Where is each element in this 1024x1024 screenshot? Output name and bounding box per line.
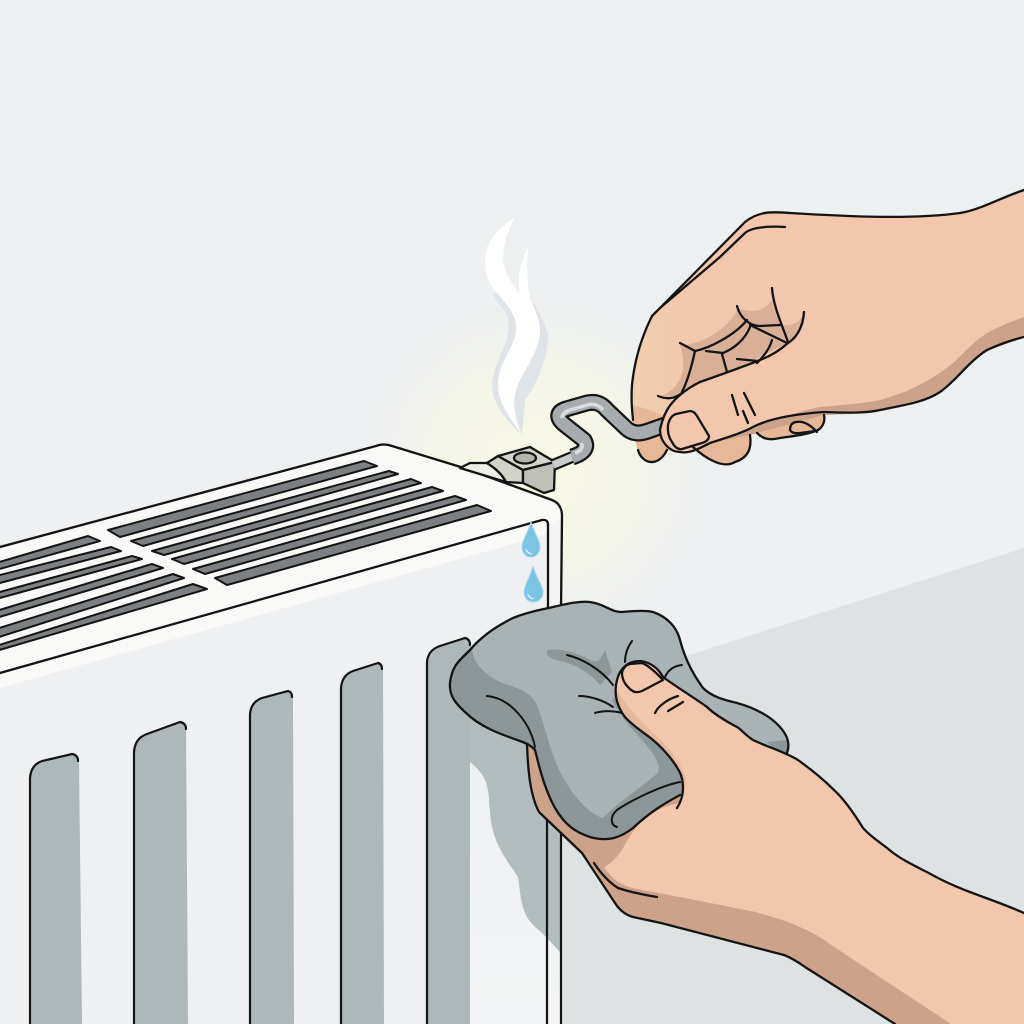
web shadow between the fingers xyxy=(660,300,804,397)
nut top face xyxy=(498,447,555,470)
lower hand: palm and wrist xyxy=(527,700,1024,1024)
floor xyxy=(561,548,1024,1024)
upper hand outlines xyxy=(632,190,1024,464)
thumb and hand outlines xyxy=(527,661,1024,1024)
key body xyxy=(559,402,668,457)
upper hand underside shadow xyxy=(710,317,1024,443)
white wedge beside the last slot xyxy=(470,762,561,1024)
right end cap xyxy=(548,522,562,1024)
thumb and back of hand fill xyxy=(616,661,1024,1024)
warm glow around the valve xyxy=(340,280,730,670)
lower hand shadows xyxy=(527,730,951,1024)
cloth creases xyxy=(487,641,682,827)
valve collar xyxy=(460,463,506,482)
slot outlines xyxy=(30,638,470,1024)
radiator top panel xyxy=(0,444,562,688)
nut right face xyxy=(523,462,555,493)
water drops xyxy=(522,522,543,602)
bleed valve xyxy=(460,447,555,493)
collar wedge xyxy=(487,456,523,483)
radiator xyxy=(0,444,562,1024)
re-drawn underside shadow xyxy=(680,897,951,1024)
cloth xyxy=(450,590,800,839)
steam shadow xyxy=(492,290,548,435)
cloth lit area xyxy=(472,590,800,818)
key body outline xyxy=(559,402,668,457)
steam wisp xyxy=(485,217,540,435)
nut hole xyxy=(514,452,536,464)
upper hand: palm and fingers xyxy=(632,190,1024,464)
upper hand: thumb xyxy=(660,190,1024,452)
lower hand: thumb xyxy=(527,661,1024,1024)
damp shadow on the radiator xyxy=(470,700,561,953)
thumbnail xyxy=(622,663,663,692)
underside wrist shadow xyxy=(590,862,951,1024)
upper drop xyxy=(522,522,540,557)
palm shadow under the cloth xyxy=(527,730,680,868)
cloth lower lobe shade xyxy=(767,740,787,755)
cloth outline xyxy=(450,602,788,839)
hex key xyxy=(553,402,668,465)
cloth dark base xyxy=(450,602,788,839)
key highlight xyxy=(562,404,603,453)
end cap edge lines xyxy=(547,800,561,1024)
cloth crease shade xyxy=(547,649,612,685)
fingertip shading xyxy=(633,405,824,464)
front slots xyxy=(30,638,471,1024)
cloth strip beside the thumb xyxy=(612,690,700,790)
key thin neck xyxy=(553,455,577,465)
steam xyxy=(485,217,548,435)
vent slats xyxy=(0,461,491,651)
radiator front panel xyxy=(0,510,562,1024)
radiator outlines xyxy=(0,444,562,673)
thumb shadow edge xyxy=(616,690,686,797)
lower drop xyxy=(524,566,543,602)
